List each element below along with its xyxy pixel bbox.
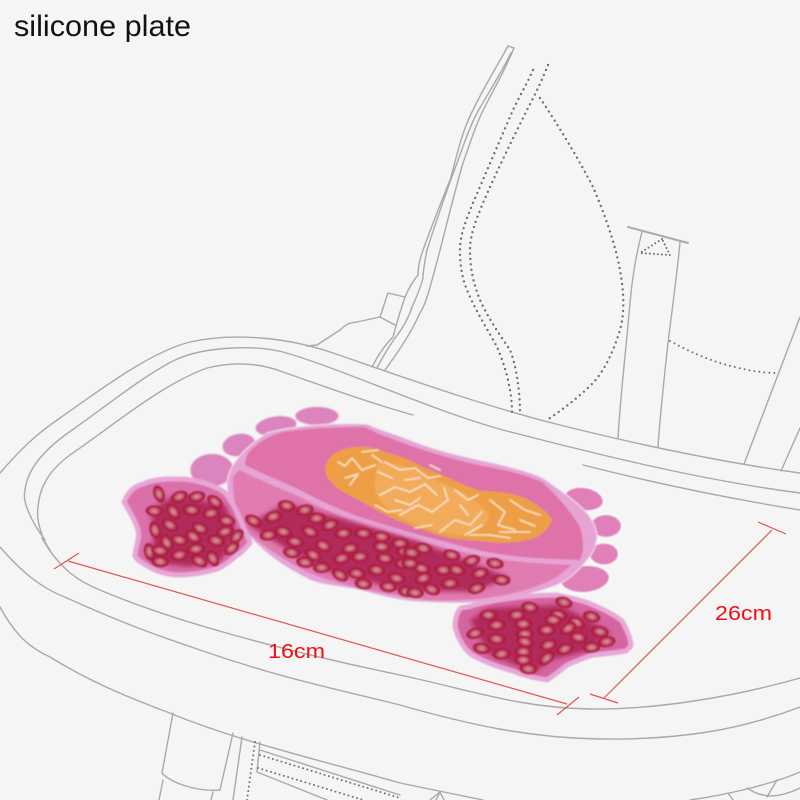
main plate rim [227, 424, 597, 603]
label: 26cm: 26cm [715, 603, 772, 625]
top compartment [245, 427, 583, 560]
dimension: depth 26cm [590, 522, 786, 703]
dark shading under seeds [150, 495, 610, 672]
title: silicone plate [14, 10, 191, 43]
chair post [618, 227, 800, 471]
pomegranate seeds: right lobe [465, 595, 616, 675]
pomegranate seeds: middle compartment [243, 499, 416, 599]
silicone plate with food [124, 406, 631, 680]
mandarin orange segments [325, 447, 552, 543]
plate toes left [190, 406, 339, 486]
right lobe [455, 595, 631, 680]
dotted seat stitching [460, 65, 623, 420]
pomegranate seeds: left lobe [142, 484, 247, 570]
bottom compartment [233, 470, 572, 600]
tray outlines [0, 337, 800, 800]
chair backrest frame [307, 46, 514, 370]
plate toes right [559, 484, 622, 595]
label: 16cm: 16cm [268, 641, 325, 663]
dimension: width 16cm [54, 553, 579, 715]
chair legs [159, 713, 800, 800]
left lobe [124, 479, 250, 575]
